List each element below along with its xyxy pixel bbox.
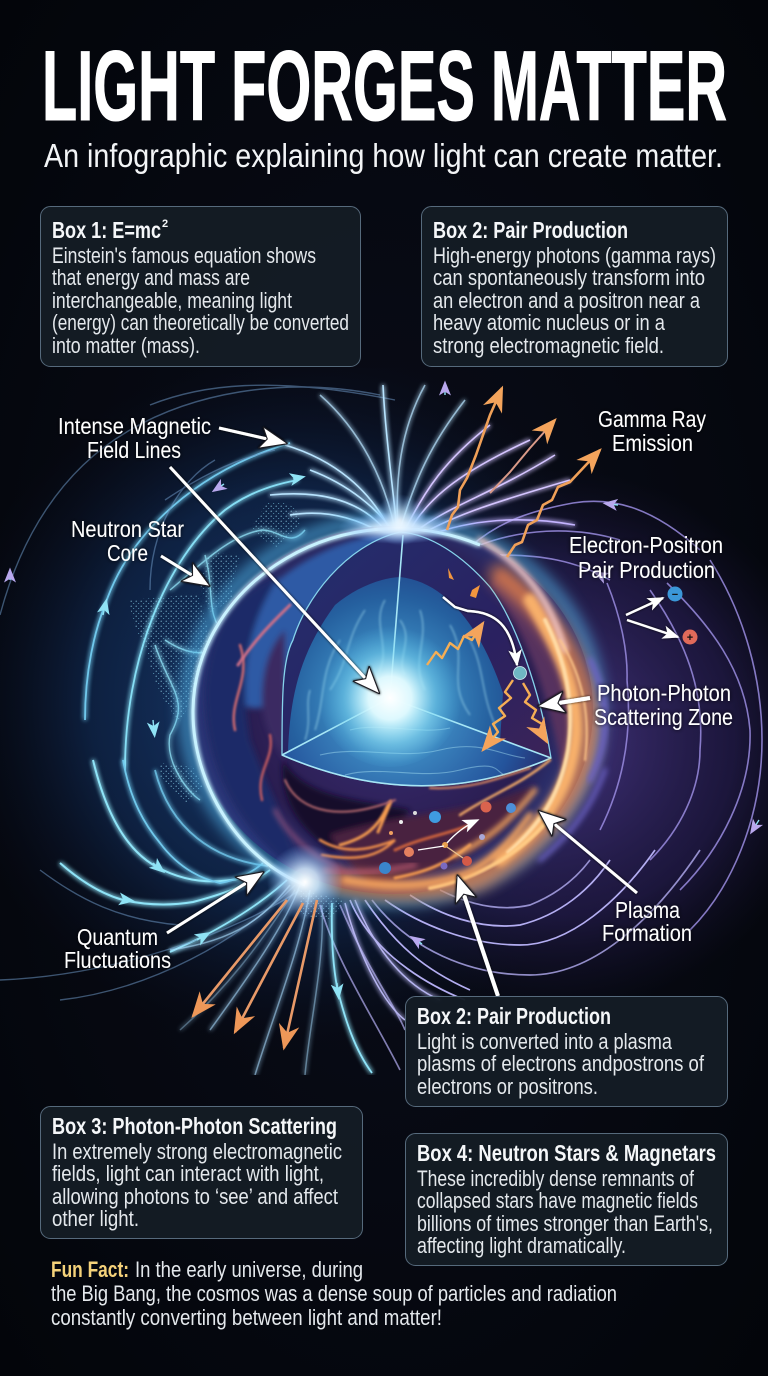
inner floor [284, 708, 549, 785]
label: plasma formation: Formation [602, 920, 692, 946]
superscript 2: 2 [162, 218, 168, 230]
magnetic field lines left [60, 443, 298, 952]
bottom pole flare [267, 844, 343, 920]
fun fact [51, 1257, 617, 1330]
heading: box 2: Box 2: Pair Production [433, 217, 628, 243]
scattering node [514, 666, 526, 680]
arrow: pair split up [626, 598, 663, 615]
arrow: neutron star core [161, 556, 208, 585]
text: plasma body: plasms of electrons andpostrons of [417, 1051, 705, 1076]
arrow: box to plasma [458, 877, 498, 996]
text: box 3 body: allowing photons to ‘see’ and affect [52, 1184, 338, 1209]
electron particle: − [672, 589, 678, 601]
panel: box 3 photon-photon scattering [40, 1106, 362, 1238]
star outer glow [186, 520, 598, 900]
text: box 2 body: can spontaneously transform into [433, 265, 705, 290]
glowing core [324, 632, 456, 764]
label: neutron star core: Neutron Star [71, 516, 184, 542]
text: box 4 body: These incredibly dense remnants of [417, 1166, 695, 1191]
space glow [0, 401, 768, 998]
plasma particles [379, 802, 516, 874]
text: box 1 body: interchangeable, meaning light [52, 288, 292, 313]
arrow: pair production beam [516, 615, 622, 621]
top pole flare [342, 514, 452, 544]
electron particle [668, 586, 682, 602]
text: box 2 body: strong electromagnetic field. [433, 333, 664, 358]
text: box 2 body: an electron and a positron near a [433, 288, 701, 313]
sphere rim light [193, 529, 480, 885]
wave arrows outside [447, 388, 600, 557]
dim outer field lines [0, 385, 395, 1000]
annotation arrows [161, 428, 678, 996]
label: quantum fluctuations: Quantum [77, 924, 158, 950]
text: box 1 body: that energy and mass are [52, 265, 250, 290]
upper pole flare [379, 496, 422, 544]
arrow: pair split down [627, 620, 678, 637]
panel: box 2 pair production [422, 206, 728, 366]
heading: box 3: Box 3: Photon-Photon Scattering [52, 1113, 337, 1139]
label: photon-photon scattering zone: Photon-Photon [597, 680, 731, 706]
arrow: quantum fluctuations [167, 873, 262, 933]
fun fact label: Fun Fact: [51, 1257, 129, 1282]
neutron star sphere [193, 526, 593, 894]
dotted quantum foam [130, 502, 345, 920]
arrow: curved photon path [443, 597, 517, 665]
dark shell embers [448, 568, 480, 598]
label: gamma ray emission: Gamma Ray [598, 406, 706, 432]
field arrowheads [10, 388, 759, 992]
text: box 1 body: (energy) can theoretically be converted [52, 310, 349, 335]
inner wedge walls [288, 577, 503, 752]
lower right sweep lines [320, 850, 700, 1070]
floor waves [320, 727, 525, 775]
magnetic field lines right [470, 501, 762, 930]
positron particle [682, 630, 698, 644]
wall texture [305, 600, 495, 740]
text: box 1 body: Einstein's famous equation shows [52, 243, 316, 268]
text: plasma body [417, 1029, 705, 1099]
label: electron-positron pair production: Electron-Positron [569, 532, 723, 558]
text: box 4 body [417, 1166, 713, 1258]
fun fact text: constantly converting between light and matter! [51, 1305, 442, 1330]
panel: box 1 E=mc2 [40, 206, 360, 366]
labels [58, 406, 733, 973]
label: quantum fluctuations: Fluctuations [64, 947, 171, 973]
text: box 3 body: In extremely strong electromagnetic [52, 1139, 342, 1164]
cutaway dome [282, 532, 551, 786]
bottom pole rays [170, 885, 440, 1075]
text: plasma body: Light is converted into a plasma [417, 1029, 673, 1054]
panel: box 2 plasma [406, 996, 728, 1106]
plasma flames [234, 540, 605, 889]
label: plasma formation: Plasma [615, 897, 680, 923]
cut edge lines [282, 535, 551, 786]
text: box 3 body [52, 1139, 342, 1231]
text: box 2 body [433, 243, 716, 358]
text: box 3 body: other light. [52, 1206, 139, 1231]
label: electron-positron pair production: Pair Production [578, 557, 715, 583]
downward gamma arrows [193, 900, 317, 1048]
internal photons [427, 623, 547, 750]
arrow: scattering zone [540, 698, 590, 706]
label: neutron star core: Core [107, 540, 148, 566]
text: box 3 body: fields, light can interact with light, [52, 1161, 324, 1186]
arrow: plasma formation [540, 812, 637, 893]
heading: box 2 plasma: Box 2: Pair Production [417, 1003, 611, 1029]
arrow: field lines short [219, 428, 285, 443]
text: box 4 body: collapsed stars have magnetic fields [417, 1188, 698, 1213]
text: box 1 body: into matter (mass). [52, 333, 200, 358]
label: gamma ray emission: Emission [612, 430, 693, 456]
positron particle: + [687, 632, 693, 644]
text: plasma body: electrons or positrons. [417, 1074, 598, 1099]
arrow: field lines to core [170, 467, 378, 692]
text: box 2 body: heavy atomic nucleus or in a [433, 310, 666, 335]
heading: box 1: Box 1: E=mc [52, 217, 161, 243]
fun fact text [51, 1257, 617, 1330]
fun fact text: In the early universe, during [135, 1257, 363, 1282]
label: photon-photon scattering zone: Scattering Zone [594, 704, 733, 730]
shell shading [205, 532, 579, 885]
label: intense magnetic field lines: Field Lines [87, 437, 181, 463]
panel: box 4 neutron stars and magnetars [406, 1134, 728, 1266]
label: intense magnetic field lines: Intense Magnetic [58, 413, 211, 439]
text: box 4 body: affecting light dramatically. [417, 1233, 626, 1258]
quantum wave strands [155, 530, 305, 800]
illustration: neutron star with magnetic field [0, 368, 768, 1075]
fun fact text: the Big Bang, the cosmos was a dense soup of particles and radiation [51, 1281, 617, 1306]
top pole rays [270, 385, 575, 535]
text: box 1 body [52, 243, 349, 358]
